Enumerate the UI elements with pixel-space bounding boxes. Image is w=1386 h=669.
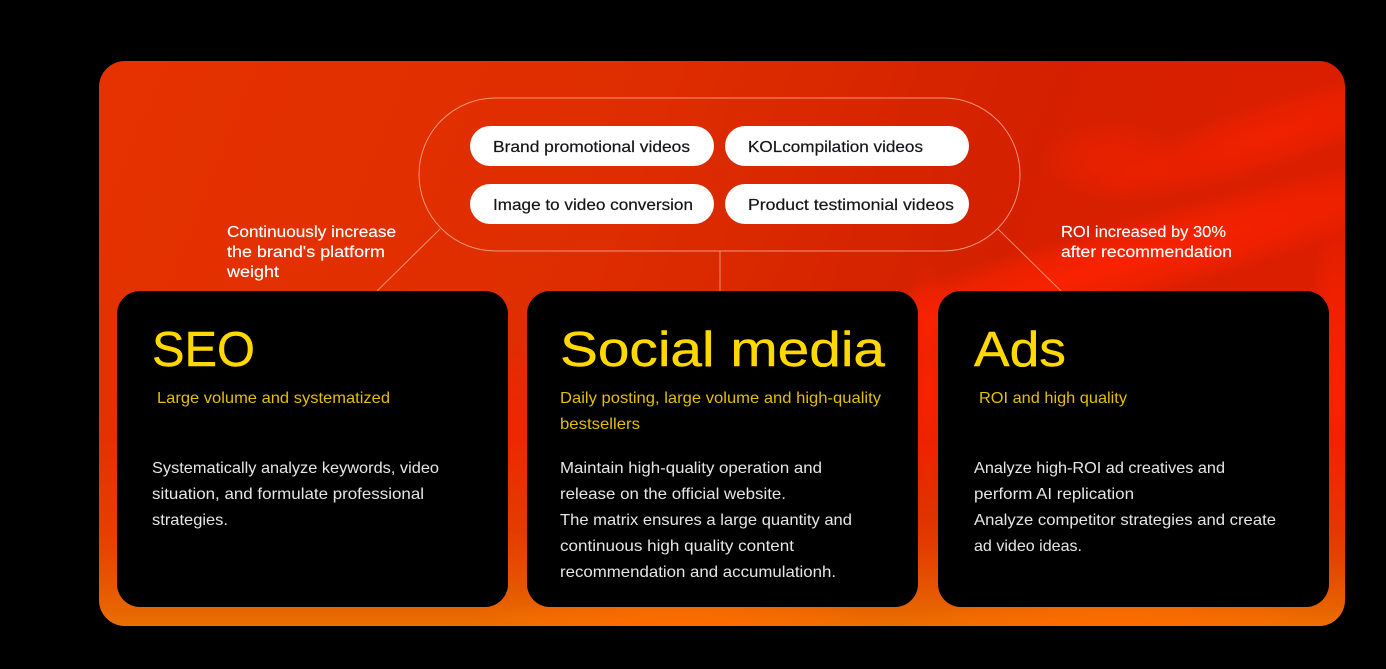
panel: Social media bbox=[527, 291, 918, 607]
button: product testimonial videos bbox=[725, 184, 969, 224]
button: product testimonial videos: Product testimonial videos bbox=[748, 197, 954, 214]
button: image to video conversion bbox=[470, 184, 714, 224]
connector lines bbox=[377, 229, 1061, 291]
heading: Social media: Social media bbox=[560, 323, 886, 377]
callout: ROI: ROI increased by 30% bbox=[1061, 224, 1226, 241]
text block: SEO details: Systematically analyze keywords, video bbox=[152, 460, 439, 477]
text block: Social media details: recommendation and accumulationh. bbox=[560, 564, 836, 581]
text block: Social media details: The matrix ensures a large quantity and bbox=[560, 512, 852, 529]
text block: Ads details bbox=[974, 460, 1276, 555]
text block: Social media details: Maintain high-quality operation and bbox=[560, 460, 822, 477]
text block: Ads details: perform AI replication bbox=[974, 486, 1134, 503]
callout: platform weight bbox=[226, 224, 396, 281]
panel: SEO bbox=[117, 291, 508, 607]
button: KOL compilation videos bbox=[725, 126, 969, 166]
subheading: Social media: Daily posting, large volume and high-quality bbox=[560, 390, 881, 407]
text block: Ads details: Analyze high-ROI ad creatives and bbox=[974, 460, 1225, 477]
text block: Social media details bbox=[560, 460, 852, 581]
outlined capsule bbox=[419, 98, 1020, 251]
text block: SEO details bbox=[152, 460, 439, 529]
callout: ROI: after recommendation bbox=[1061, 244, 1232, 261]
button: brand promotional videos: Brand promotional videos bbox=[493, 139, 690, 156]
button: KOL compilation videos: KOLcompilation videos bbox=[748, 139, 923, 156]
subheading: Social media: bestsellers bbox=[560, 416, 640, 433]
panel: gradient background bbox=[99, 61, 1345, 626]
subheading: Ads: ROI and high quality bbox=[979, 390, 1127, 407]
panel: Ads bbox=[938, 291, 1329, 607]
button: brand promotional videos bbox=[470, 126, 714, 166]
callout: platform weight: weight bbox=[226, 264, 280, 281]
text block: SEO details: situation, and formulate professional bbox=[152, 486, 424, 503]
button: image to video conversion: Image to video conversion bbox=[493, 197, 693, 214]
subheading: SEO: Large volume and systematized bbox=[157, 390, 390, 407]
callout: ROI bbox=[1061, 224, 1232, 261]
callout: platform weight: Continuously increase bbox=[227, 224, 396, 241]
text block: SEO details: strategies. bbox=[152, 512, 228, 529]
text block: Ads details: Analyze competitor strategies and create bbox=[974, 512, 1276, 529]
text block: Social media details: continuous high quality content bbox=[560, 538, 795, 555]
heading: SEO: SEO bbox=[152, 323, 255, 377]
text block: Ads details: ad video ideas. bbox=[974, 538, 1082, 555]
subheading: Social media bbox=[560, 390, 881, 433]
callout: platform weight: the brand's platform bbox=[227, 244, 385, 261]
text block: Social media details: release on the official website. bbox=[560, 486, 786, 503]
heading: Ads: Ads bbox=[974, 323, 1066, 377]
